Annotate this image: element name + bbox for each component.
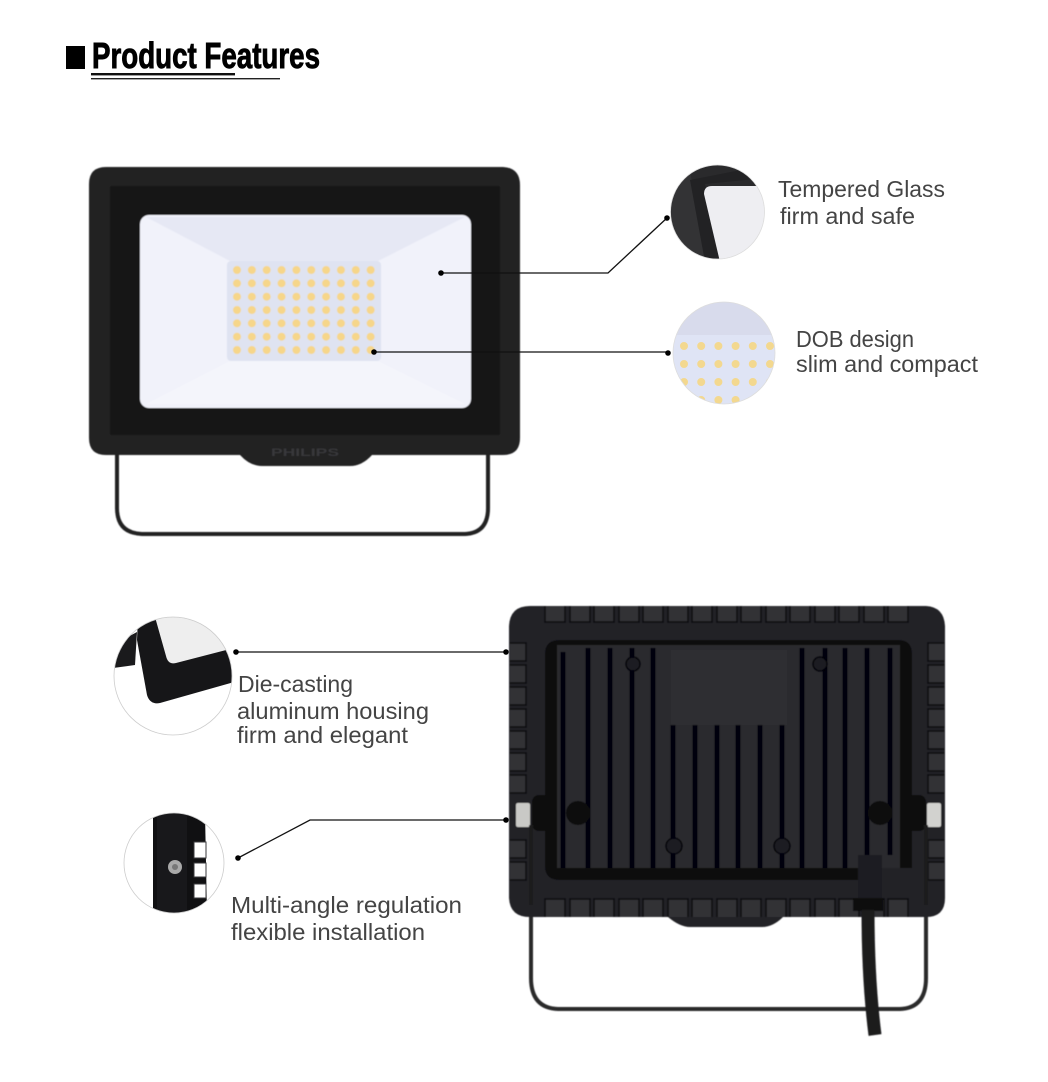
text: multi-angle regulation	[231, 892, 462, 945]
text: tempered glass: firm and safe	[780, 203, 915, 229]
text: DOB design	[796, 326, 979, 377]
white reflector panel	[140, 215, 471, 408]
housing, front	[89, 167, 520, 466]
title: Product Features	[66, 35, 320, 79]
title: Product Features: Product Features	[92, 35, 320, 76]
pivot hinge, left	[516, 795, 590, 831]
text: die-casting aluminum housing: Die-casting	[238, 671, 353, 697]
label plate	[671, 650, 787, 725]
icon: pivot bolt detail	[123, 813, 225, 915]
mounting bracket, front	[117, 450, 488, 534]
recessed heat sink	[545, 640, 912, 880]
callout leader: multi-angle regulation	[235, 817, 509, 861]
icon: LED board detail	[672, 301, 776, 405]
LED board	[227, 261, 381, 361]
front view of floodlight	[89, 167, 520, 534]
heat sink fins	[563, 648, 890, 868]
mounting bracket, rear	[531, 900, 926, 1009]
cooling tabs	[510, 606, 944, 917]
text: DOB design: DOB design	[796, 326, 914, 352]
icon: tempered glass detail	[670, 165, 770, 262]
callout leader: DOB design	[371, 349, 671, 356]
rear view of floodlight	[509, 606, 945, 1035]
text: multi-angle regulation: Multi-angle regulation	[231, 892, 462, 918]
callout leader: die-casting housing	[233, 649, 509, 655]
bracket arms over housing	[531, 825, 926, 905]
icon: aluminum housing corner detail	[113, 616, 234, 736]
pivot hinge, right	[868, 795, 941, 831]
housing, rear	[509, 606, 945, 927]
cable gland and cable	[853, 855, 883, 1035]
text: multi-angle regulation: flexible installation	[231, 919, 425, 945]
callout leader: tempered glass	[438, 215, 670, 276]
text: tempered glass: Tempered Glass	[778, 176, 945, 202]
text: tempered glass	[778, 176, 945, 229]
text: DOB design: slim and compact	[796, 351, 979, 377]
screw bosses	[626, 657, 827, 854]
text: die-casting aluminum housing: aluminum housing	[237, 698, 429, 724]
brand mark: PHILIPS	[271, 447, 339, 459]
inner bezel	[110, 186, 500, 435]
text: die-casting aluminum housing	[237, 671, 429, 748]
text: die-casting aluminum housing: firm and elegant	[237, 722, 409, 748]
